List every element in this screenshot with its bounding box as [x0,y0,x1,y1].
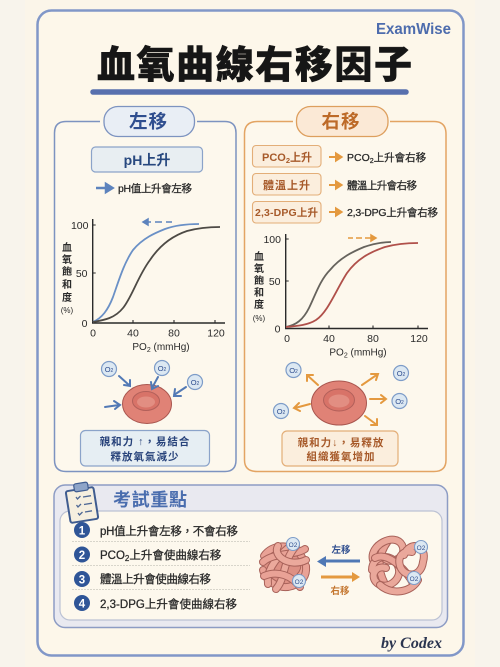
title: 血氧曲線右移因子 [97,45,412,87]
point 2 [74,546,222,563]
x tick labels: 120 [410,333,428,345]
factor row: 2,3-DPG: 2,3-DPG上升 [255,206,318,219]
point 2: 2 [79,550,85,562]
factor row: temperature: 體溫上升 [263,178,311,192]
O2 bubbles on relaxed form [414,540,428,554]
factor row: 2,3-DPG [252,202,438,223]
dividers [72,542,250,590]
panel: right shift [244,106,446,472]
y axis title: (%) [253,314,266,323]
y tick labels: 100 [71,220,89,232]
y tick labels [71,220,89,330]
curve: blue [93,224,199,322]
factor note: pH值上升會左移 [118,182,192,195]
factor row: PCO2: 上升 [290,150,312,164]
y tick labels [263,234,281,336]
factor row: PCO2: 2 [286,156,290,165]
panel background [54,485,448,628]
illustration: red blood cell releasing oxygen: O2 [397,369,406,378]
factor row: temperature: 體溫上升會右移 [347,179,418,192]
point 3: 體溫上升會使曲線右移 [100,572,212,586]
arrow: to left: 左移 [331,544,351,556]
point 4 [74,595,238,611]
title underline [93,89,406,95]
point 2: 2 [125,554,130,563]
illustration: tense hemoglobin knot: O2 [289,542,298,549]
heading pill: 左移 [104,106,194,136]
arrows out of cell [294,374,386,425]
y axis title: 飽 [254,274,264,287]
illustration: relaxed hemoglobin knot: O2 [417,545,426,552]
O2 bubbles [274,362,408,418]
y axis title: 和 [254,286,264,299]
illustration: tense hemoglobin knot: O2 [295,579,304,586]
point 1 [74,522,238,538]
x axis title: 2 [147,347,151,354]
heading: 考試重點: 考試重點 [113,490,187,510]
shift arrow [143,219,172,225]
illustration: red blood cell binding oxygen: O2 [191,378,200,387]
signature: by Codex [381,635,442,652]
y tick labels: 50 [76,268,88,280]
callout: left shift result: 釋放氧氣減少 [110,450,180,463]
arrow: to right: 右移 [330,585,350,597]
illustration: relaxed hemoglobin knot: O2 [410,576,419,583]
curve: grey [286,242,391,327]
heading pill: 左移: 左移 [129,111,168,132]
x axis title: (mmHg) [348,348,387,358]
point 2: PCO [100,550,125,562]
y axis title [61,241,74,315]
point 3 [74,571,212,587]
x tick labels: 0 [284,333,290,345]
callout: right shift result [282,431,398,466]
arrow: to left [317,544,360,567]
illustration: red blood cell releasing oxygen: O2 [289,366,298,375]
factor row: PCO2: 上升會右移 [374,151,427,164]
factor row: PCO2 [252,146,427,167]
callout: right shift result: 親和力↓，易釋放 [298,436,384,449]
y axis title: 氧 [254,262,264,275]
point 1: 1 [79,526,86,538]
y axis title: 氧 [62,253,72,266]
factor row: 2,3-DPG: 2,3-DPG上升會右移 [347,206,438,219]
callout: right shift result: 組織獲氧增加 [306,450,376,463]
x axis title: (mmHg) [151,342,190,353]
x tick labels: 80 [168,328,180,340]
point 2: 上升會使曲線右移 [129,548,222,562]
x axis title: PO [132,342,147,353]
heading pill: 右移 [296,106,388,136]
shift arrow [348,235,376,241]
illustration: relaxed hemoglobin knot [372,540,428,591]
x axis title: PO [329,348,344,358]
y axis title: (%) [61,306,74,315]
y tick labels: 0 [82,318,88,330]
y axis title: 血 [254,250,264,263]
illustration: red blood cell binding oxygen: O2 [158,364,167,373]
point 4: 4 [79,598,86,610]
panel border left [54,122,236,472]
curve: red [286,243,418,327]
y tick labels: 0 [275,324,281,336]
illustration: red blood cell releasing oxygen: O2 [395,397,404,406]
arrow: to right [321,572,360,597]
inner panel [60,511,442,620]
point 4: 2,3-DPG上升會使曲線右移 [100,597,238,611]
curve: dark [93,227,220,322]
icon: blue arrow [96,184,112,192]
y axis title [253,250,266,323]
y axis title: 飽 [62,265,72,278]
x tick labels [90,328,225,340]
factor box: pH上升 [92,147,202,172]
x tick labels: 40 [323,333,335,345]
factor row: PCO2: PCO [347,152,370,164]
callout: left shift result [80,430,210,466]
x tick labels: 0 [90,328,96,340]
factor row: PCO2: PCO [262,152,286,164]
panel: left shift [54,106,236,472]
chart: left shift curve [61,219,225,354]
factor row: temperature [252,174,418,195]
point 3: 3 [79,574,85,586]
arrows into cell [105,376,186,409]
y axis title: 度 [254,298,264,311]
panel: exam key points [54,482,448,628]
x axis title: 2 [344,352,348,360]
illustration: tense hemoglobin knot [263,538,306,589]
x tick labels: 80 [367,333,379,345]
brand: ExamWise: ExamWise [376,21,451,38]
factor row: PCO2: 2 [370,158,374,165]
y axis title: 度 [62,291,72,304]
O2 bubbles on tense form [286,538,300,550]
y tick labels: 100 [263,234,281,246]
illustration: red blood cell releasing oxygen: O2 [277,407,286,416]
x tick labels: 40 [127,328,139,340]
y tick labels: 50 [269,276,281,288]
icon: clipboard [66,482,98,523]
panel border right [244,122,446,472]
illustration: red blood cell binding oxygen: O2 [105,365,114,374]
y axis title: 和 [62,278,72,291]
illustration: red blood cell releasing oxygen [274,362,408,425]
O2 bubbles [102,360,202,390]
heading pill: 右移: 右移 [321,111,361,132]
y axis title: 血 [62,241,72,254]
x tick labels [284,333,428,345]
chart: right shift curve [253,234,428,360]
x tick labels: 120 [207,328,225,340]
callout: left shift result: 親和力 ↑，易結合 [100,435,190,448]
point 1: pH值上升會左移，不會右移 [100,524,238,538]
illustration: red blood cell binding oxygen [102,360,202,424]
factor box: pH上升: pH上升 [124,152,170,168]
